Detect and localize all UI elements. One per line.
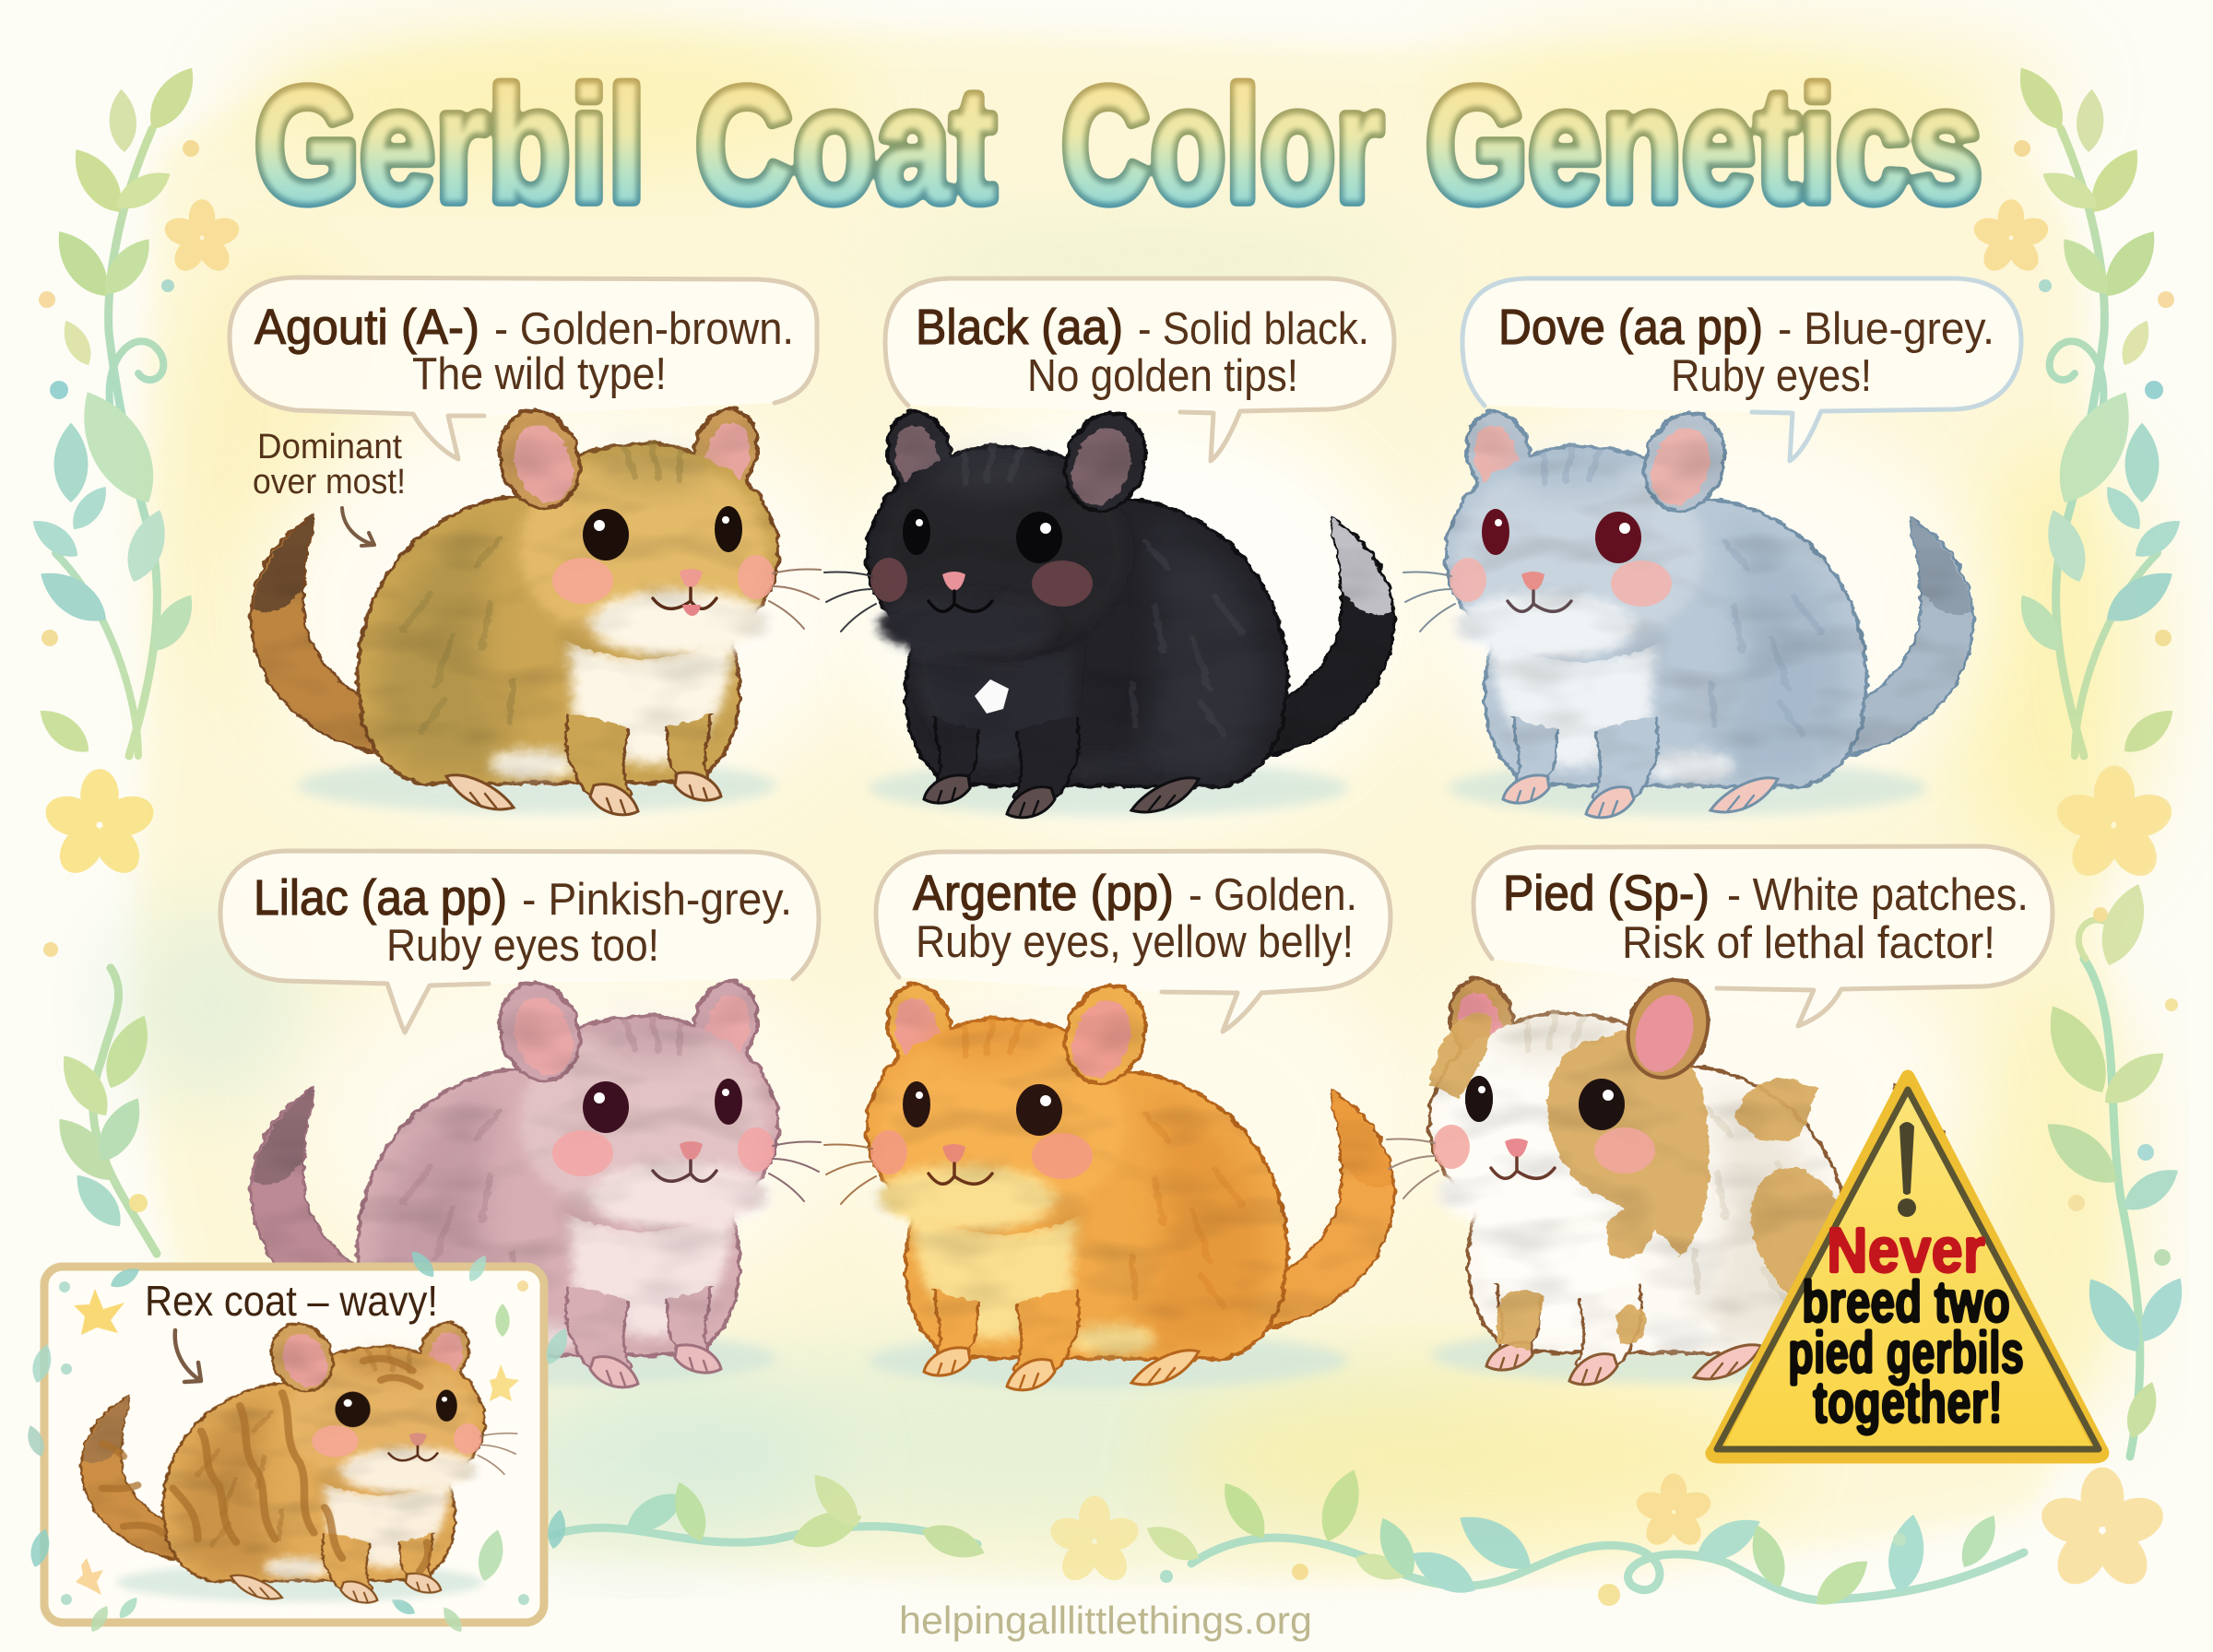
warning sign [1712,1077,2102,1457]
pied coat patches [1429,1013,1841,1350]
border vine: bottom [553,1464,2024,1615]
title [254,55,1982,236]
annotation: dominant over most [253,428,406,546]
speech bubble: dove: Dove (aa pp) [1498,300,1763,355]
speech bubble: dove [1462,278,2021,461]
speech bubble: lilac: Lilac (aa pp) [254,870,507,926]
speech bubble: argente: - Golden. [1189,870,1357,920]
annotation: dominant over most: over most! [253,463,406,502]
icon: exclamation mark [1898,1122,1916,1217]
warning text: Never [1827,1214,1985,1286]
sign triangle [1712,1077,2102,1457]
gerbil: black [824,403,1394,818]
title: Gerbil [254,55,645,236]
arrow: rex coat [175,1330,201,1382]
speech bubble: dove: - Blue-grey. [1778,304,1994,354]
warning text: pied gerbils [1788,1319,2024,1386]
speech bubble: lilac [220,851,819,1032]
title: Coat [695,55,996,236]
gerbil: lilac [251,973,821,1387]
speech bubble: agouti: - Golden-brown. [494,304,794,354]
speech bubble: argente: Argente (pp) [913,866,1174,921]
speech bubble: pied: Risk of lethal factor! [1622,918,1995,968]
tongue [682,605,701,616]
footer: website: helpingalllittlethings.org [899,1599,1312,1642]
border vine: top right [1970,59,2187,881]
panel frame [44,1267,544,1622]
gerbil: dove [1403,403,1973,818]
wavy coat stripes [102,1359,428,1571]
speech bubble: agouti [230,277,817,459]
inset panel: rex coat [23,1246,574,1635]
white chest spot [975,679,1009,714]
warning text: breed two [1802,1268,2010,1335]
gerbil: agouti [251,400,821,815]
gerbil: argente [824,975,1394,1390]
speech bubble: argente: Ruby eyes, yellow belly! [916,917,1354,967]
speech bubble: agouti: Agouti (A-) [254,300,479,355]
speech bubble: black: Black (aa) [916,300,1123,355]
border vine: lower right [2034,765,2194,1594]
border vine: lower left [43,942,160,1254]
speech bubble: pied: - White patches. [1727,870,2029,920]
speech bubble: black [885,278,1394,461]
speech bubble: pied [1473,846,2053,1026]
pied face details [1465,970,1721,1174]
speech bubble: agouti: The wild type! [412,349,667,399]
border vine: top left [26,59,243,881]
speech bubble: argente [876,851,1391,1032]
speech bubble: lilac: Ruby eyes too! [386,921,659,971]
speech bubble: lilac: - Pinkish-grey. [522,875,792,925]
label: rex coat: Rex coat – wavy! [145,1277,438,1325]
frame leaves and stars [23,1246,574,1635]
gerbil: pied [1387,970,1957,1385]
title: Genetics [1426,55,1982,236]
speech bubble: pied: Pied (Sp-) [1503,866,1710,921]
speech bubble: dove: Ruby eyes! [1671,351,1872,401]
speech bubble: black: No golden tips! [1027,351,1298,401]
warning text: together! [1813,1369,2003,1435]
gerbil: rex [81,1316,517,1603]
warning text [1788,1214,2024,1435]
speech bubble: black: - Solid black. [1138,304,1369,354]
annotation: dominant over most: Dominant [257,428,402,466]
title: Color [1061,55,1383,236]
